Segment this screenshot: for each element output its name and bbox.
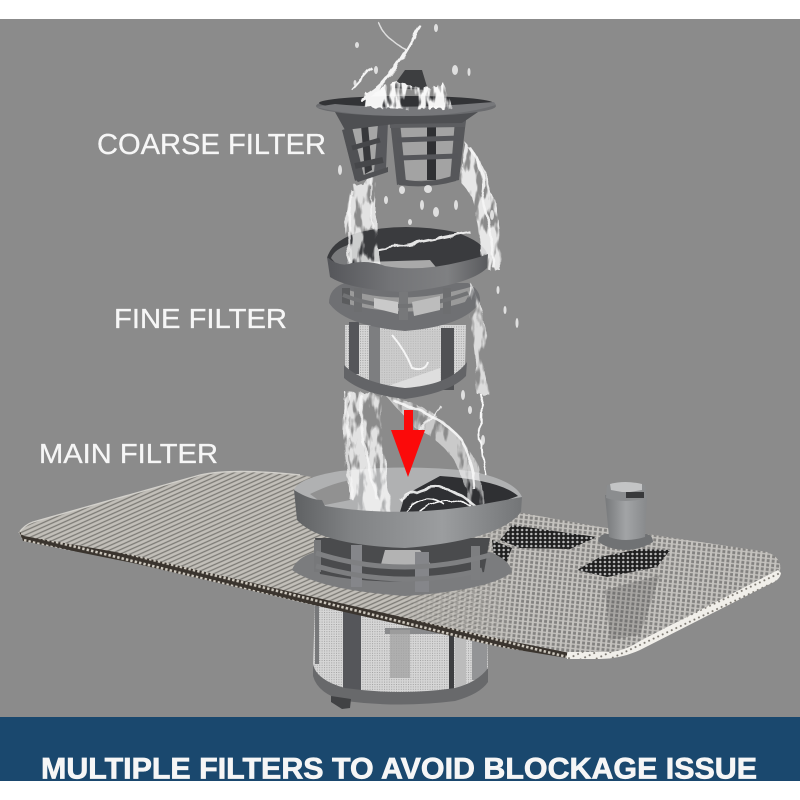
label: fine filter: FINE FILTER xyxy=(114,303,287,334)
plate surface right xyxy=(414,512,780,652)
basket mesh xyxy=(345,325,466,392)
main filter front band xyxy=(294,490,522,548)
central knob xyxy=(392,70,428,90)
curtain left xyxy=(345,176,380,272)
cage interior xyxy=(315,538,490,582)
main filter lower basket xyxy=(313,600,488,709)
ring interior xyxy=(327,227,488,272)
funnel under rim xyxy=(335,112,478,130)
fine filter lower section xyxy=(327,227,488,399)
label: coarse filter: COARSE FILTER xyxy=(97,129,326,161)
label: main filter: MAIN FILTER xyxy=(39,438,218,469)
left basket xyxy=(342,122,388,182)
bottom banner xyxy=(0,717,800,786)
top water jet xyxy=(352,22,420,100)
side stream beside fine filter xyxy=(466,282,490,395)
dark mesh openings xyxy=(500,525,597,549)
coarse filter xyxy=(316,70,496,186)
plate front edge left xyxy=(19,531,570,658)
fine filter front band xyxy=(327,254,488,292)
banner background xyxy=(0,717,800,781)
basket bottom ring xyxy=(344,362,467,399)
mesh shaded patch xyxy=(605,575,660,640)
streak lines xyxy=(348,148,494,268)
flange xyxy=(292,552,512,596)
plate top edge highlight xyxy=(19,472,300,533)
right basket xyxy=(390,120,466,186)
streak lines xyxy=(347,392,486,512)
flange xyxy=(329,283,480,331)
translucent arc right xyxy=(385,395,484,512)
water between coarse and fine filters xyxy=(345,142,502,272)
banner headline: MULTIPLE FILTERS TO AVOID BLOCKAGE ISSUE xyxy=(41,752,757,786)
translucent column left xyxy=(343,392,396,520)
plate surface left xyxy=(19,472,780,657)
water falling into main filter xyxy=(343,392,486,520)
mesh plate xyxy=(19,472,781,659)
plate front edge right xyxy=(567,570,781,659)
red down arrow xyxy=(391,410,425,477)
rim xyxy=(316,96,496,116)
water droplets xyxy=(338,24,518,445)
cage columns xyxy=(342,288,468,320)
splash on rim xyxy=(352,82,452,109)
cage columns and rails xyxy=(314,540,490,592)
ring interior xyxy=(294,468,522,522)
spray post on plate xyxy=(598,482,653,550)
main filter upper assembly xyxy=(292,468,522,596)
curtain right xyxy=(458,142,502,272)
